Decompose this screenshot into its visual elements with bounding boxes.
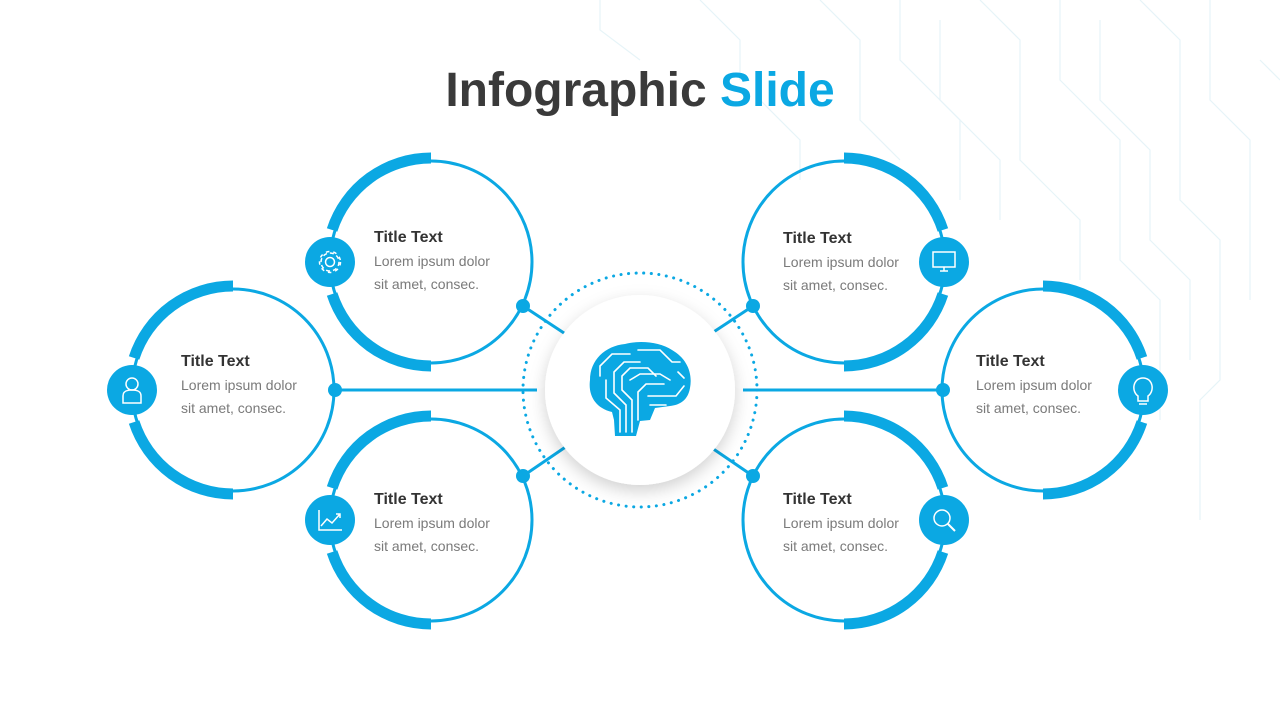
text: top-right xyxy=(783,230,899,293)
ring: bottom-left xyxy=(330,416,532,624)
text: left: sit amet, consec. xyxy=(181,400,286,416)
icon: monitor xyxy=(919,237,969,287)
icon: chart xyxy=(305,495,355,545)
text: left: Lorem ipsum dolor xyxy=(181,377,297,393)
text: top-right: Lorem ipsum dolor xyxy=(783,254,899,270)
text: top-left: Title Text xyxy=(374,229,443,246)
text: top-left xyxy=(374,229,490,292)
ring: bottom-right xyxy=(743,416,945,624)
text: left: Title Text xyxy=(181,353,250,370)
ring: top-right xyxy=(743,158,945,366)
center circle with brain xyxy=(545,295,735,485)
text: right: Title Text xyxy=(976,353,1045,370)
ring: right xyxy=(942,286,1144,494)
text: right: Lorem ipsum dolor xyxy=(976,377,1092,393)
text: top-right: Title Text xyxy=(783,230,852,247)
text: top-left: sit amet, consec. xyxy=(374,276,479,292)
text: bottom-left xyxy=(374,491,490,554)
text: top-right: sit amet, consec. xyxy=(783,277,888,293)
text: left xyxy=(181,353,297,416)
text: bottom-right: Lorem ipsum dolor xyxy=(783,515,899,531)
text: bottom-right: sit amet, consec. xyxy=(783,538,888,554)
connectors xyxy=(328,299,950,483)
text: bottom-right: Title Text xyxy=(783,491,852,508)
text: right: sit amet, consec. xyxy=(976,400,1081,416)
icon: person xyxy=(107,365,157,415)
ring: left xyxy=(132,286,334,494)
icon: magnifier xyxy=(919,495,969,545)
icon: gear xyxy=(305,237,355,287)
text: bottom-left: Title Text xyxy=(374,491,443,508)
dotted ring xyxy=(523,273,757,507)
text: bottom-right xyxy=(783,491,899,554)
text: bottom-left: Lorem ipsum dolor xyxy=(374,515,490,531)
icon: lightbulb xyxy=(1118,365,1168,415)
ring: top-left xyxy=(330,158,532,366)
text: top-left: Lorem ipsum dolor xyxy=(374,253,490,269)
title: Infographic Slide xyxy=(445,64,835,117)
icon: brain xyxy=(590,342,691,436)
text: right xyxy=(976,353,1092,416)
text: bottom-left: sit amet, consec. xyxy=(374,538,479,554)
